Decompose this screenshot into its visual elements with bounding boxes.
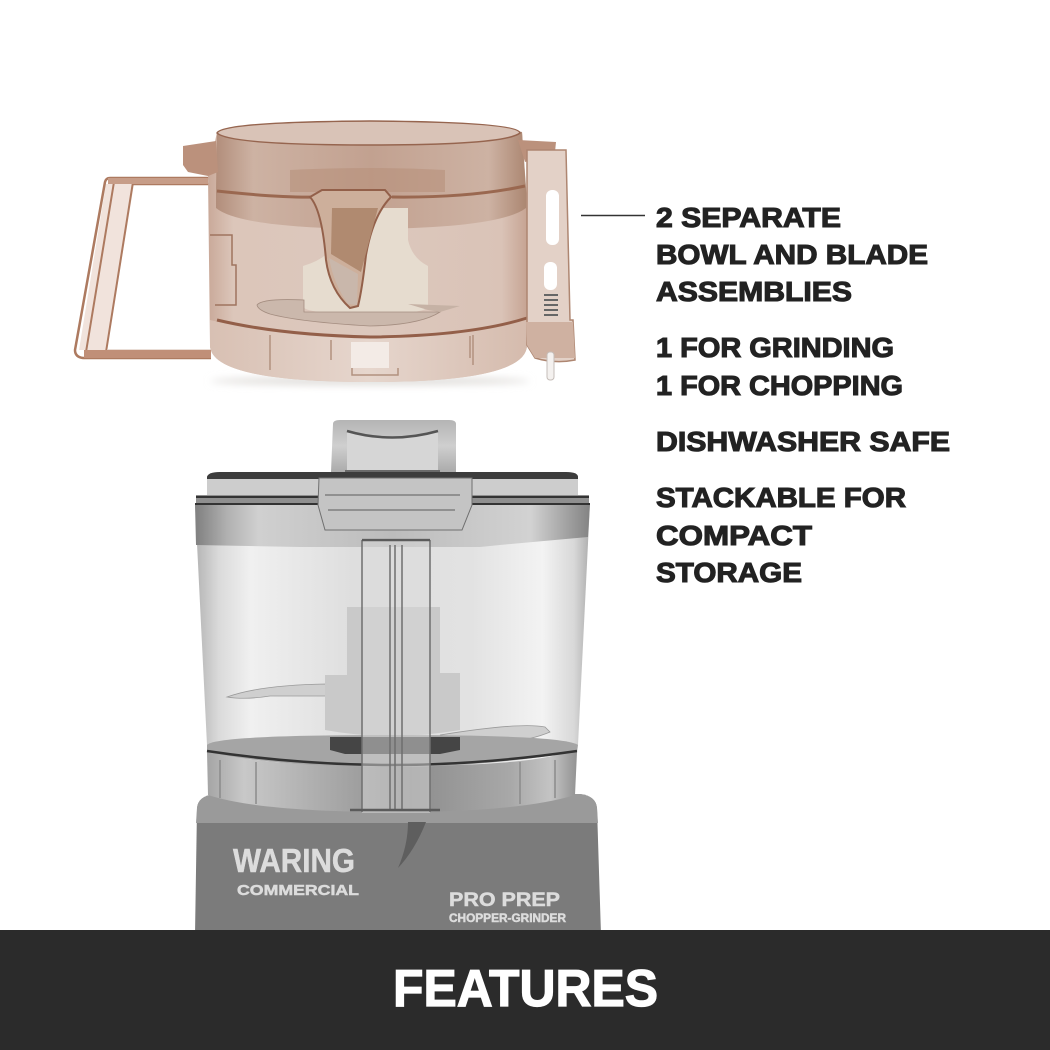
feature list bbox=[656, 202, 950, 588]
feature list: COMPACT bbox=[656, 520, 812, 551]
notch bbox=[351, 342, 389, 368]
hub bbox=[325, 607, 460, 736]
base logo bbox=[233, 842, 567, 925]
base logo: CHOPPER-GRINDER bbox=[449, 913, 567, 925]
dark line on bowl bbox=[217, 186, 525, 197]
brown grinding bowl assembly bbox=[75, 121, 575, 385]
blade bbox=[257, 300, 440, 326]
feature list: BOWL AND BLADE bbox=[656, 239, 928, 270]
feature list: ASSEMBLIES bbox=[656, 276, 852, 307]
base logo: WARING bbox=[233, 842, 355, 879]
bowl upper band bbox=[195, 503, 590, 547]
lid bbox=[195, 472, 590, 530]
bowl body bbox=[208, 123, 527, 382]
gray food processor bbox=[195, 420, 601, 935]
hub bbox=[303, 208, 428, 314]
motor base bbox=[195, 794, 601, 935]
footer band bbox=[0, 930, 1050, 1050]
blades bbox=[227, 684, 550, 743]
bowl handle bbox=[75, 178, 211, 358]
feature list: STACKABLE FOR bbox=[656, 482, 906, 513]
lid knob bbox=[331, 420, 456, 472]
bowl base line bbox=[217, 318, 527, 337]
bowl top rim bbox=[217, 121, 520, 145]
bowl floor bbox=[207, 735, 578, 767]
base logo: PRO PREP bbox=[449, 890, 560, 911]
feature list: 1 FOR GRINDING bbox=[656, 332, 894, 363]
window cutout details bbox=[210, 235, 236, 305]
side latch bbox=[527, 150, 575, 362]
feature list: DISHWASHER SAFE bbox=[656, 426, 950, 457]
chute bbox=[310, 190, 391, 308]
feature list: STORAGE bbox=[656, 557, 802, 588]
leader line bbox=[581, 214, 645, 216]
feature list: 1 FOR CHOPPING bbox=[656, 370, 903, 401]
bowl lower ring bbox=[207, 752, 577, 812]
chute bbox=[350, 538, 440, 813]
base logo: COMMERCIAL bbox=[237, 882, 359, 899]
footer title: FEATURES bbox=[393, 960, 658, 1018]
bowl upper band bbox=[216, 123, 526, 229]
bowl side tabs bbox=[183, 140, 556, 176]
bowl lower section bbox=[210, 318, 527, 382]
feature list: 2 SEPARATE bbox=[656, 202, 841, 233]
bowl body bbox=[195, 503, 590, 766]
